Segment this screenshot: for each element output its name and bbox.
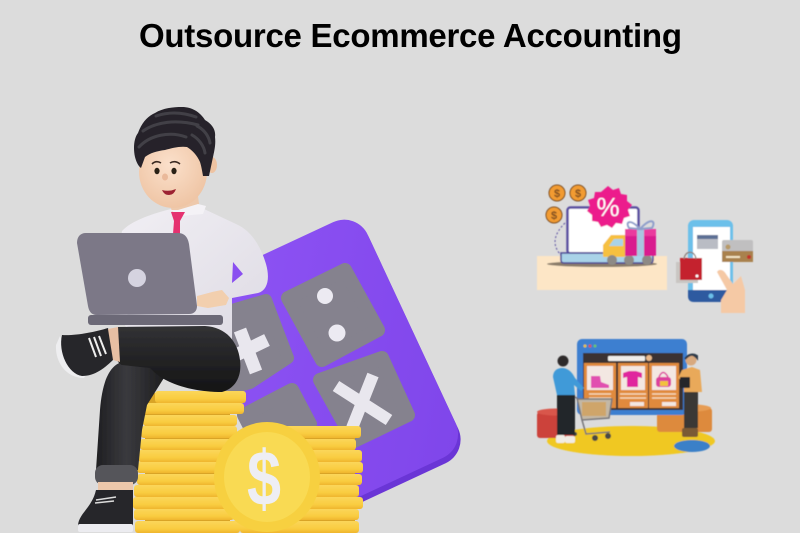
red cylinder [537,408,575,438]
laptop logo [128,269,146,287]
calculator body [185,211,469,533]
lower shoe [78,490,133,532]
discount badge [587,186,632,228]
laptop shadow [547,261,657,267]
key: bottom left [244,390,310,450]
product card: handbag [649,363,679,408]
right coin stack [240,426,363,533]
dollar coins [546,185,586,223]
product card: t-shirt [618,363,648,408]
hand [197,290,229,308]
large dollar coin: $ [247,434,281,522]
orange cylinder [657,404,712,432]
left coin stack [133,391,246,533]
title: Outsource Ecommerce Accounting [139,17,682,54]
shopping cart [572,396,612,441]
illustration: businessman with laptop [56,107,268,532]
mouth [162,189,176,195]
neck [168,196,200,212]
key: divide [288,270,378,360]
peach panel [537,256,667,290]
left shopper [553,356,584,443]
shopping bag [676,252,702,283]
shirt [112,209,268,340]
laptop base [88,315,223,325]
hair [134,107,215,176]
coin connector [555,223,565,254]
key: plus [225,300,288,390]
tie [171,212,185,234]
yellow floor disc [547,426,715,456]
credit card [722,240,753,262]
illustration: giant calculator [185,211,469,533]
eyebrows [152,162,180,164]
collar [170,204,206,216]
hand [717,270,745,313]
truck [603,235,652,265]
nose [162,174,168,180]
ankle [98,482,133,494]
ear [207,157,217,173]
raised shoe [56,328,115,378]
ankle raised [108,327,120,362]
face [139,136,207,208]
illustration: coin stacks [133,391,363,533]
storefront monitor [577,339,687,415]
eyes [154,168,177,174]
discount badge: % [596,192,620,222]
dollar coins: $ [575,188,581,200]
illustration: ecommerce delivery [537,185,753,313]
lower leg [96,362,172,470]
right assistant [678,354,702,437]
dollar coins: $ [554,188,560,200]
blue blob [674,440,710,452]
upper leg [115,326,240,392]
mobile phone [688,220,733,302]
illustration: online store [537,339,715,456]
trouser cuff [95,465,138,485]
dollar coins: $ [551,210,557,222]
purple gap beside arm [232,262,243,283]
product card: shoe [584,363,616,408]
large dollar coin [214,422,320,532]
key: multiply [320,358,408,441]
laptop screen [77,233,197,315]
delivery laptop [561,208,653,263]
gift box [625,221,656,256]
